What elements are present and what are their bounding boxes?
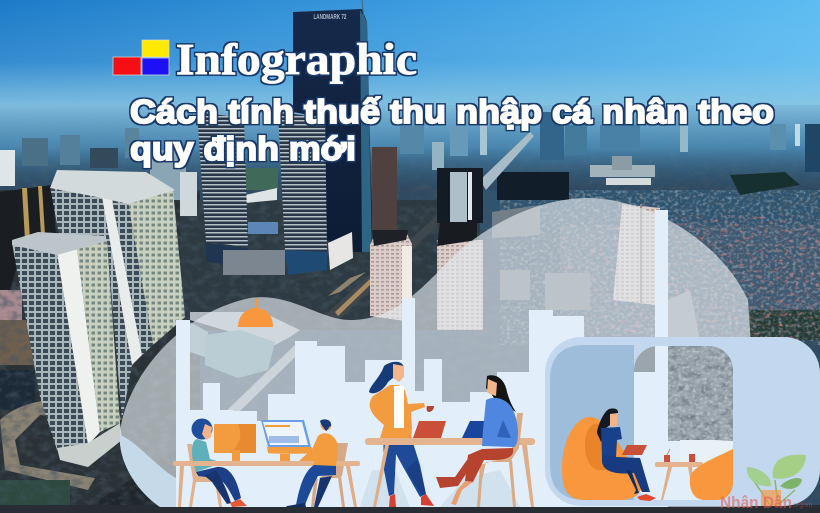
Landmark 72 tower [293,0,372,252]
tower sign: LANDMARK 72 [314,14,347,21]
chair right [311,443,348,507]
apartment tower back [50,170,185,420]
gold dark building [0,185,56,290]
chair left [187,444,222,507]
desk legs [178,466,357,507]
watermark: .org.vn [791,502,813,509]
white block beside twin tower [180,172,197,216]
woman on beanbag [562,408,656,501]
city photo ground [0,105,820,513]
green field and low block [245,168,278,234]
standing woman with cup [369,362,434,507]
twin tower right [278,112,327,275]
low gray podium [223,250,285,275]
title [130,93,774,167]
dark office block [437,168,483,223]
apartment tower front [12,232,122,467]
second beanbag [690,449,733,500]
white tower in blob [613,204,660,305]
pod window [634,346,733,500]
title: Cách tính thuế thu nhập cá nhân theo [130,93,774,130]
distant skyline [0,112,820,200]
blue screen monitor [261,420,312,461]
worker left [192,418,247,507]
twin tower left [197,112,248,267]
red square logo [113,40,169,75]
billboard building [328,232,353,270]
infographic heading: Infographic [176,35,417,84]
rooftops and streets under blob [190,205,700,417]
table two with laptops [365,421,535,507]
sky background [0,0,820,150]
orange monitor [214,424,256,461]
title: quy định mới [130,130,356,167]
pale reflections under table [120,435,520,507]
pink tower two [437,223,483,330]
civic complex and dark blocks [480,132,800,200]
pink tower one [370,230,412,322]
watermark: Nhân Dân [720,493,792,512]
lounge pod [545,337,820,506]
road and lot [322,215,440,322]
plant icon [747,455,806,505]
worker right [286,419,338,507]
translucent blob backdrop [120,198,751,507]
lamp icon [238,298,273,327]
desk top [173,461,360,466]
brown tower [372,147,397,232]
seated woman on chair [436,375,523,507]
side table with cups [655,449,703,500]
desk one with monitors and two workers [173,418,360,507]
light silhouette skyline [176,210,668,507]
